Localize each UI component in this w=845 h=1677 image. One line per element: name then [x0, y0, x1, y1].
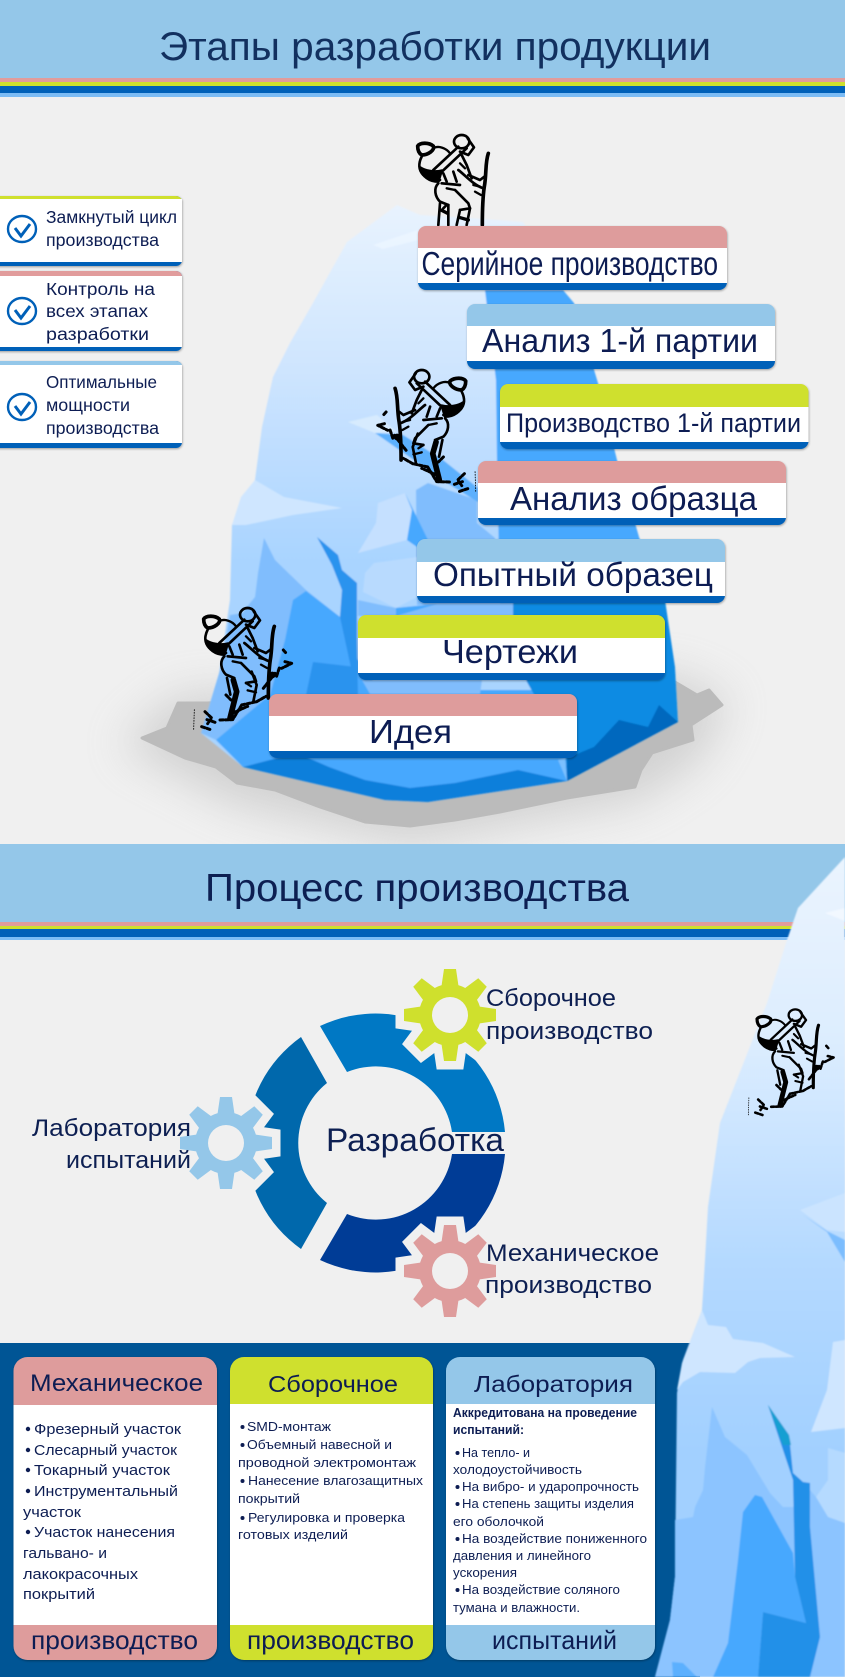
card list: участок	[23, 1505, 82, 1521]
step: idea: Идея	[369, 713, 452, 750]
side card: control at all stages	[0, 271, 182, 351]
card list: На тепло- и	[462, 1446, 530, 1460]
iceberg: main	[201, 205, 678, 802]
label: assembly production: производство	[486, 1018, 653, 1045]
card list: его оболочкой	[453, 1515, 544, 1529]
card list: Регулировка и проверка	[248, 1510, 406, 1525]
card list: покрытий	[23, 1587, 95, 1603]
card: mechanical production	[14, 1357, 217, 1660]
climber: middle	[378, 370, 476, 492]
label: mechanical production: производство	[485, 1272, 652, 1299]
label: testing laboratory: Лаборатория	[32, 1115, 191, 1142]
label: разработки	[46, 324, 149, 344]
label: производства	[46, 418, 159, 438]
card list: Объемный навесной и	[247, 1437, 392, 1452]
card list: Участок нанесения	[34, 1525, 175, 1541]
step: idea	[269, 694, 577, 758]
label: mechanical production	[485, 1240, 659, 1299]
step: serial production: Серийное производство	[422, 245, 718, 282]
accreditation note	[453, 1406, 637, 1437]
card footer: испытаний	[492, 1625, 617, 1655]
card list: проводной электромонтаж	[238, 1455, 416, 1470]
label: мощности	[46, 395, 130, 415]
icon: check	[8, 298, 36, 324]
process ring	[180, 969, 505, 1317]
card list: лакокрасочных	[23, 1567, 139, 1583]
card list: Нанесение влагозащитных	[248, 1473, 424, 1488]
card list: Слесарный участок	[34, 1443, 178, 1459]
ring segment: top right	[320, 1014, 505, 1132]
label: testing laboratory	[32, 1115, 191, 1174]
step: drawings: Чертежи	[442, 633, 578, 670]
title: Этапы разработки продукции	[159, 25, 711, 69]
icon: check	[8, 216, 36, 242]
label: mechanical production: Механическое	[486, 1240, 659, 1267]
label: Замкнутый цикл	[46, 207, 177, 227]
step: first batch analysis	[467, 304, 775, 369]
card: assembly production	[230, 1357, 433, 1660]
side card: closed production cycle	[0, 196, 182, 266]
side card: optimal capacity	[0, 361, 182, 448]
card list: давления и линейного	[453, 1549, 591, 1563]
card heading: Сборочное	[268, 1371, 398, 1397]
card list: На степень защиты изделия	[462, 1497, 634, 1511]
step: first batch analysis: Анализ 1-й партии	[482, 322, 758, 359]
step: sample analysis: Анализ образца	[510, 480, 758, 517]
card footer: производство	[247, 1625, 414, 1655]
accreditation note: испытаний:	[453, 1423, 524, 1437]
card list: холодоустойчивость	[453, 1463, 582, 1477]
card list: покрытий	[238, 1491, 300, 1506]
icon: check	[8, 394, 36, 420]
card footer: производство	[31, 1625, 198, 1655]
climber: right iceberg	[748, 1009, 834, 1115]
card list: Фрезерный участок	[34, 1422, 182, 1438]
card list: гальвано- и	[23, 1546, 107, 1562]
label	[46, 372, 159, 438]
gear: assembly	[404, 969, 496, 1061]
ring center label: Разработка	[326, 1122, 505, 1158]
header: product development stages	[0, 0, 845, 97]
label: assembly production: Сборочное	[486, 985, 616, 1012]
climber: base	[194, 608, 292, 730]
step: prototype	[417, 539, 725, 603]
iceberg shadow	[120, 675, 730, 845]
label: всех этапах	[46, 301, 148, 321]
card list	[23, 1422, 182, 1603]
label: Контроль на	[46, 279, 155, 299]
card heading: Лаборатория	[474, 1371, 633, 1397]
card list: Токарный участок	[34, 1463, 171, 1479]
label: Оптимальные	[46, 372, 157, 392]
card list	[453, 1446, 647, 1615]
card list	[238, 1419, 424, 1542]
title: Процесс производства	[205, 867, 630, 910]
step: first batch production: Производство 1-й партии	[506, 408, 801, 438]
label: производства	[46, 230, 159, 250]
label: testing laboratory: испытаний	[66, 1147, 191, 1174]
step: drawings	[358, 615, 665, 680]
card list: На воздействие соляного	[462, 1583, 620, 1597]
ring segment: left	[246, 1037, 327, 1249]
iceberg: right side	[655, 857, 845, 1677]
label	[46, 279, 155, 344]
step: prototype: Опытный образец	[433, 556, 713, 593]
card list: SMD-монтаж	[247, 1419, 331, 1434]
card list: ускорения	[453, 1566, 517, 1580]
card list: тумана и влажности.	[453, 1601, 580, 1615]
step: sample analysis	[478, 461, 786, 525]
climber: summit	[418, 135, 488, 225]
gear halos	[180, 969, 496, 1317]
label: assembly production	[486, 985, 653, 1045]
bottom panel background	[0, 1343, 700, 1677]
card list: На вибро- и ударопрочность	[462, 1480, 639, 1494]
ring segment: bottom right	[320, 1154, 505, 1272]
step: first batch production	[500, 384, 808, 449]
card list: готовых изделий	[238, 1527, 348, 1542]
step: serial production	[418, 226, 727, 290]
card: testing laboratory	[446, 1357, 655, 1660]
card heading: Механическое	[30, 1370, 203, 1397]
gear: mechanical	[404, 1225, 496, 1317]
gear: laboratory	[180, 1097, 272, 1189]
label	[46, 207, 177, 250]
header: production process	[0, 844, 845, 940]
card list: Инструментальный	[34, 1484, 178, 1500]
card list: На воздействие пониженного	[462, 1532, 647, 1546]
accreditation note: Аккредитована на проведение	[453, 1406, 637, 1420]
